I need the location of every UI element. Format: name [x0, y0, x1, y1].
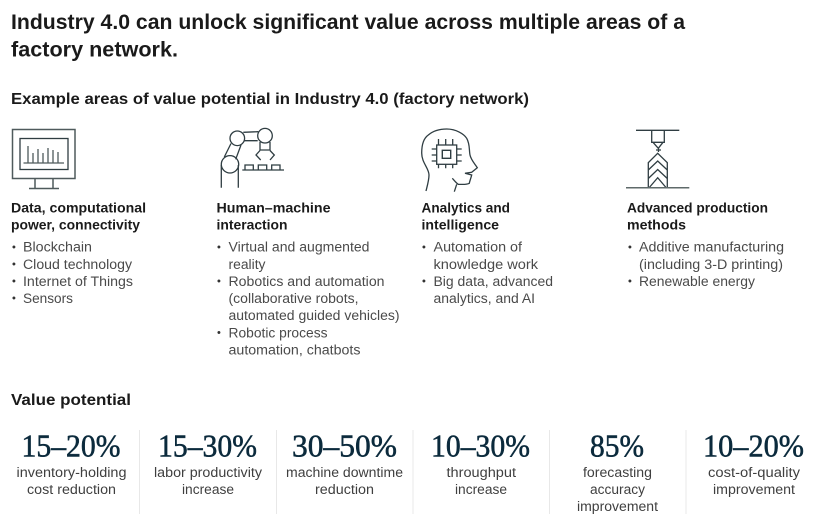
- bullet list: automation, chatbots: [228, 342, 361, 357]
- bullet list: [422, 240, 553, 306]
- bullet list: •: [217, 276, 221, 288]
- stat: throughput: increase: [455, 482, 507, 497]
- stat: forecasting accuracy: accuracy: [590, 482, 645, 497]
- stat: machine downtime: 30–50%: [292, 428, 397, 464]
- panel: data, computational power, connectivity: [11, 130, 146, 306]
- stat: labor productivity: [154, 428, 262, 497]
- stat: inventory-holding: 15–20%: [22, 428, 120, 464]
- stat: inventory-holding: inventory-holding: [16, 465, 127, 480]
- bullet list: [217, 240, 400, 357]
- icon: head with chip: [422, 129, 477, 192]
- stat: inventory-holding: cost reduction: [27, 482, 116, 497]
- stat: machine downtime: machine downtime: [286, 465, 403, 480]
- heading: Advanced production: [627, 200, 768, 216]
- bullet list: knowledge work: [434, 257, 538, 272]
- bullet list: Virtual and augmented: [228, 240, 370, 255]
- stat: forecasting accuracy: forecasting: [583, 465, 652, 480]
- bullet list: Cloud technology: [23, 257, 132, 272]
- heading: methods: [627, 218, 686, 233]
- title: factory network.: [11, 38, 178, 62]
- heading: [11, 200, 146, 233]
- stat: cost-of-quality: improvement: [713, 482, 795, 497]
- bullet list: •: [12, 276, 16, 288]
- bullet list: Robotics and automation: [228, 274, 384, 289]
- stat: machine downtime: reduction: [315, 482, 374, 497]
- heading: [627, 200, 768, 233]
- stat: forecasting accuracy: 85%: [590, 428, 644, 464]
- bullet list: [12, 240, 133, 306]
- bullet list: •: [12, 292, 16, 304]
- bullet list: Internet of Things: [23, 274, 133, 289]
- stat: labor productivity: 15–30%: [158, 428, 257, 464]
- icon: 3-D printer: [626, 130, 689, 188]
- heading: intelligence: [422, 218, 500, 233]
- bullet list: Renewable energy: [639, 274, 755, 289]
- stat: cost-of-quality: cost-of-quality: [708, 465, 800, 480]
- stat: labor productivity: increase: [182, 482, 234, 497]
- heading: [216, 200, 331, 233]
- title: Industry 4.0 can unlock significant value across multiple areas of a: [11, 11, 685, 34]
- heading: interaction: [216, 218, 288, 233]
- heading: Data, computational: [11, 200, 146, 216]
- bullet list: (collaborative robots,: [228, 291, 358, 306]
- bullet list: Big data, advanced: [434, 274, 553, 289]
- bullet list: •: [217, 242, 221, 254]
- bullet list: •: [628, 242, 632, 254]
- icon: monitor with bar chart: [12, 130, 75, 188]
- heading: power, connectivity: [11, 218, 140, 233]
- stat: machine downtime: [286, 428, 403, 497]
- bullet list: •: [12, 242, 16, 254]
- bullet list: •: [422, 276, 426, 288]
- panel: human-machine interaction: [216, 128, 400, 357]
- bullet list: •: [12, 258, 16, 270]
- bullet list: Robotic process: [228, 325, 328, 340]
- icon: robot arm: [221, 128, 284, 188]
- stat: forecasting accuracy: improvement: [577, 499, 658, 514]
- panel: advanced production methods: [626, 130, 784, 289]
- stat: throughput: throughput: [446, 465, 516, 480]
- bullet list: reality: [228, 257, 266, 272]
- stat: throughput: [431, 428, 530, 497]
- bullet list: •: [217, 327, 221, 339]
- heading: [422, 200, 510, 233]
- heading: Human–machine: [216, 200, 331, 216]
- panel: analytics and intelligence: [422, 129, 553, 306]
- title: [11, 11, 685, 62]
- heading: Analytics and: [422, 200, 510, 216]
- stat: cost-of-quality: 10–20%: [703, 428, 804, 464]
- bullet list: Additive manufacturing: [639, 240, 784, 255]
- stat: labor productivity: labor productivity: [154, 465, 262, 480]
- bullet list: Blockchain: [23, 240, 92, 255]
- bullet list: (including 3-D printing): [639, 257, 783, 272]
- bullet list: •: [628, 276, 632, 288]
- bullet list: analytics, and AI: [434, 291, 535, 306]
- heading: value potential: Value potential: [11, 392, 131, 409]
- stat: inventory-holding: [16, 428, 127, 497]
- stat: cost-of-quality: [703, 428, 804, 497]
- bullet list: [628, 240, 784, 289]
- bullet list: Automation of: [434, 240, 522, 255]
- stat: forecasting accuracy: [577, 428, 658, 514]
- bullet list: automated guided vehicles): [228, 308, 400, 323]
- bullet list: •: [422, 242, 426, 254]
- stat: throughput: 10–30%: [431, 428, 530, 464]
- bullet list: Sensors: [23, 291, 73, 306]
- subheading: Example areas of value potential in Industry 4.0 (factory network): [11, 91, 529, 108]
